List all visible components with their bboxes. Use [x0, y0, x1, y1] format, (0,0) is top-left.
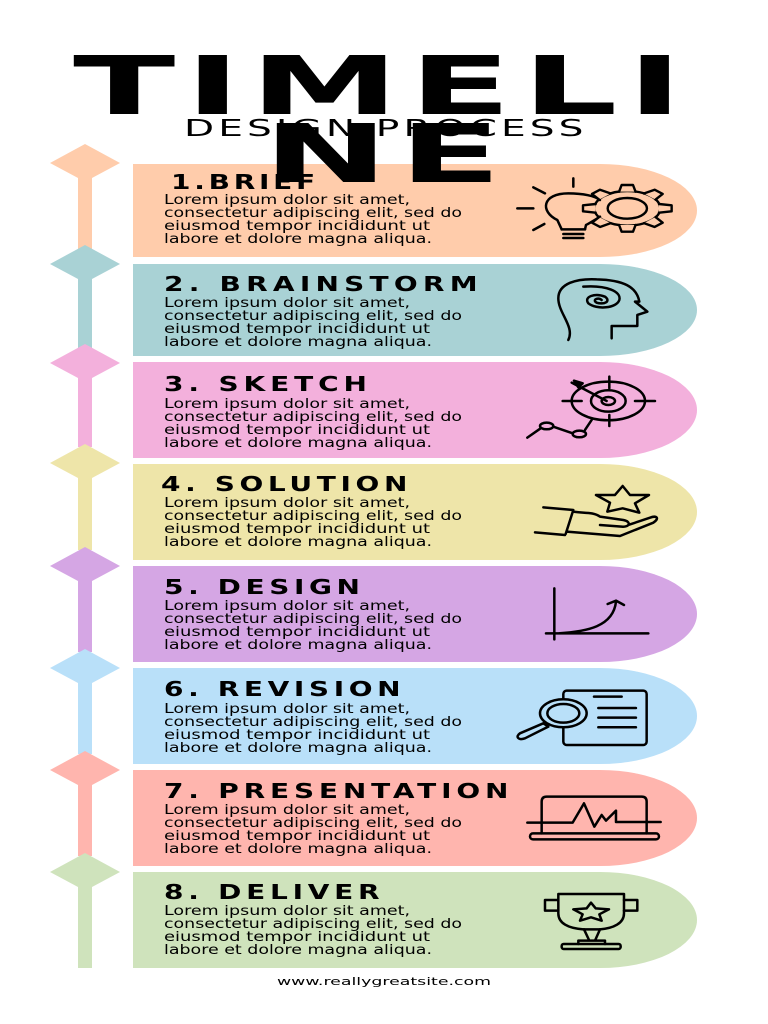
body text: Lorem ipsum dolor sit amet,: [164, 599, 410, 614]
heading: 3. SKETCH: [164, 372, 367, 396]
body text: Lorem ipsum dolor sit amet,: [164, 803, 410, 818]
body text: Lorem ipsum dolor sit amet,: [164, 397, 410, 412]
panel: brainstorm: [133, 264, 697, 356]
body text: labore et dolore magna aliqua.: [164, 638, 432, 653]
title: [73, 39, 683, 202]
body text: Lorem ipsum dolor sit amet,: [164, 193, 410, 208]
body text: consectetur adipiscing elit, sed do: [164, 612, 462, 627]
body text: [164, 702, 462, 756]
body text: eiusmod tempor incididunt ut: [164, 522, 430, 537]
footer url: www.reallygreatsite.com: [277, 976, 491, 988]
timeline column: [50, 144, 120, 968]
body text: consectetur adipiscing elit, sed do: [164, 816, 462, 831]
panel: deliver: [133, 872, 697, 968]
panel: presentation: [133, 770, 697, 866]
panel: revision: [133, 668, 697, 764]
body text: Lorem ipsum dolor sit amet,: [164, 496, 410, 511]
panel background: [133, 566, 697, 662]
marker 3: [50, 344, 120, 447]
body text: consectetur adipiscing elit, sed do: [164, 309, 462, 324]
title: TIMELI: [73, 39, 683, 134]
panel: design: [133, 566, 697, 662]
body text: Lorem ipsum dolor sit amet,: [164, 904, 410, 919]
panel: brief: [133, 164, 697, 257]
body text: consectetur adipiscing elit, sed do: [164, 715, 462, 730]
heading: 1.BRIEF: [171, 170, 315, 194]
body text: labore et dolore magna aliqua.: [164, 335, 432, 350]
heading: 2. BRAINSTORM: [164, 272, 478, 296]
body text: eiusmod tempor incididunt ut: [164, 625, 430, 640]
body text: eiusmod tempor incididunt ut: [164, 930, 430, 945]
icon: hand with star: [535, 486, 657, 536]
body text: eiusmod tempor incididunt ut: [164, 423, 430, 438]
body text: labore et dolore magna aliqua.: [164, 436, 432, 451]
body text: [164, 397, 462, 451]
panel: sketch: [133, 362, 697, 458]
body text: Lorem ipsum dolor sit amet,: [164, 296, 410, 311]
heading: 4. SOLUTION: [161, 472, 407, 496]
body text: labore et dolore magna aliqua.: [164, 842, 432, 857]
panel background: [133, 164, 697, 257]
icon: growth chart: [546, 588, 648, 639]
marker 7: [50, 751, 120, 856]
marker 2: [50, 245, 120, 348]
panel background: [133, 770, 697, 866]
icon: light bulb and gear: [517, 178, 672, 238]
marker 1: [50, 144, 120, 250]
body text: eiusmod tempor incididunt ut: [164, 219, 430, 234]
marker 8: [50, 853, 120, 968]
panel: solution: [133, 464, 697, 560]
body text: [164, 599, 462, 653]
heading: 8. DELIVER: [164, 880, 380, 904]
body text: labore et dolore magna aliqua.: [164, 943, 432, 958]
body text: eiusmod tempor incididunt ut: [164, 829, 430, 844]
body text: eiusmod tempor incididunt ut: [164, 322, 430, 337]
body text: Lorem ipsum dolor sit amet,: [164, 702, 410, 717]
title: NE: [263, 107, 501, 202]
icon: laptop with pulse chart: [527, 797, 661, 839]
heading: 7. PRESENTATION: [164, 779, 508, 803]
body text: consectetur adipiscing elit, sed do: [164, 410, 462, 425]
panel background: [133, 264, 697, 356]
body text: labore et dolore magna aliqua.: [164, 535, 432, 550]
body text: [164, 296, 462, 350]
body text: consectetur adipiscing elit, sed do: [164, 206, 462, 221]
body text: labore et dolore magna aliqua.: [164, 232, 432, 247]
marker 5: [50, 547, 120, 652]
body text: consectetur adipiscing elit, sed do: [164, 917, 462, 932]
heading: 6. REVISION: [164, 677, 401, 701]
marker 6: [50, 649, 120, 754]
body text: [164, 904, 462, 958]
icon: head with spiral: [558, 279, 647, 340]
marker 4: [50, 444, 120, 550]
heading: 5. DESIGN: [164, 575, 360, 599]
icon: trophy: [545, 894, 637, 949]
panel background: [133, 668, 697, 764]
body text: consectetur adipiscing elit, sed do: [164, 509, 462, 524]
body text: [164, 193, 462, 247]
icon: target and path: [527, 377, 655, 438]
panel background: [133, 362, 697, 458]
panel background: [133, 464, 697, 560]
icon: document and magnifier: [518, 691, 647, 745]
subtitle: DESIGN PROCESS: [184, 114, 584, 142]
body text: eiusmod tempor incididunt ut: [164, 728, 430, 743]
body text: [164, 803, 462, 857]
panel background: [133, 872, 697, 968]
body text: [164, 496, 462, 550]
body text: labore et dolore magna aliqua.: [164, 741, 432, 756]
